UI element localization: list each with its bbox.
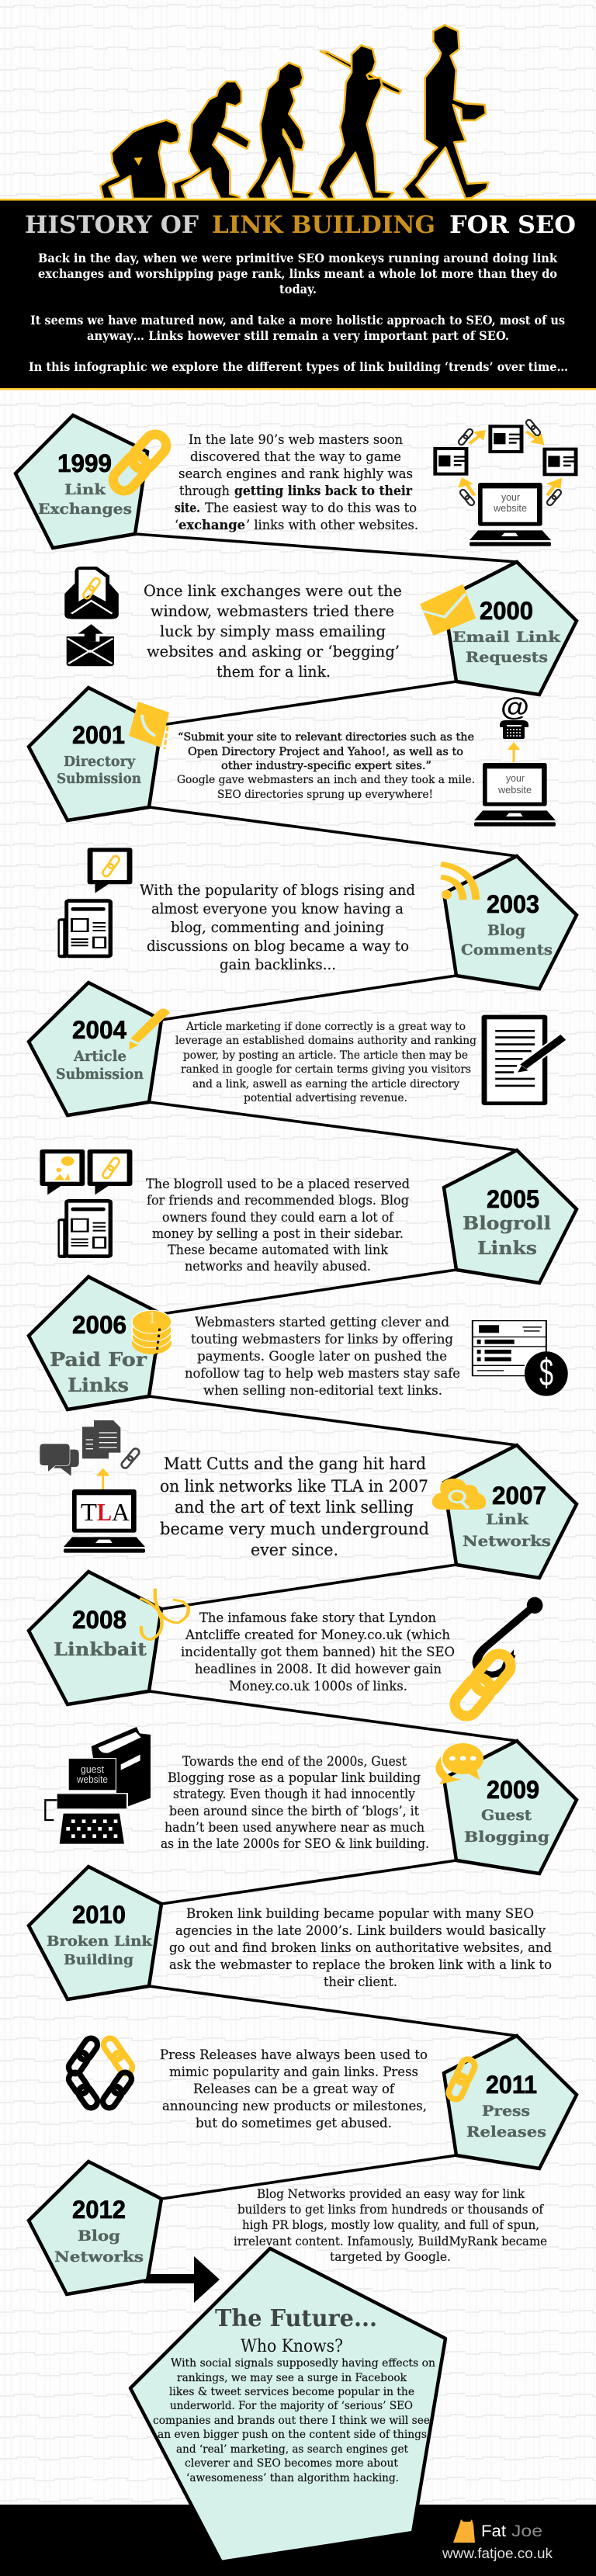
- label: [464, 1807, 549, 1846]
- label: Broken Link: [47, 1934, 153, 1950]
- body text: and ‘real’ marketing, as search engines get: [176, 2443, 408, 2456]
- pentagon 2004: [29, 983, 161, 1115]
- year 2012: 2012: [72, 2196, 126, 2224]
- intro text: [29, 251, 568, 374]
- body text: [160, 1454, 429, 1560]
- body text: through: [179, 484, 230, 499]
- figure: upright hominid: [247, 63, 313, 199]
- body text: payments. Google later on pushed the: [197, 1349, 447, 1364]
- label: Comments: [461, 941, 553, 959]
- icon: black hook with yellow link: [450, 1597, 542, 1721]
- body text: With social signals supposedly having effects on: [171, 2357, 435, 2370]
- body text: site.: [175, 501, 200, 516]
- panel: 2012 blog networks: [29, 2162, 547, 2294]
- year 2011: 2011: [486, 2071, 537, 2099]
- body text: These became automated with link: [168, 1243, 388, 1257]
- pentagon 2010: [29, 1867, 161, 1999]
- label: Guest: [481, 1807, 532, 1824]
- body text: touting webmasters for links by offering: [191, 1332, 453, 1347]
- logo mark: [453, 2519, 475, 2543]
- body text: [169, 1906, 552, 1990]
- body text: [161, 1754, 429, 1851]
- body text: “Submit your site to relevant directories such as the: [178, 731, 474, 744]
- body text: [185, 1315, 460, 1399]
- icon: envelopes: [64, 567, 119, 666]
- panel: 2003 blog comments: [57, 848, 577, 989]
- body text: agencies in the late 2000’s. Link builders would basically: [175, 1923, 546, 1939]
- icon: comment bubble and newspaper: [57, 848, 132, 958]
- header band black fill: [0, 200, 596, 388]
- icon: document and pen: [482, 1015, 567, 1105]
- body text: an even bigger push on the content side of things: [158, 2429, 427, 2441]
- figure: hunter with spear: [319, 45, 393, 199]
- body text: nofollow tag to help web masters stay safe: [185, 1366, 460, 1382]
- label: Requests: [466, 649, 548, 666]
- body text: them for a link.: [217, 662, 331, 681]
- body text: [144, 581, 402, 681]
- label: [463, 1213, 551, 1259]
- year 1999: 1999: [57, 449, 112, 477]
- body text: getting links back to their: [234, 484, 413, 499]
- title: FOR SEO: [449, 211, 576, 239]
- body text: underworld. For the majority of ‘serious’ SEO: [170, 2400, 413, 2412]
- icon: chat, documents and TLA laptop: [40, 1420, 145, 1553]
- body text: ’ links with other websites.: [246, 518, 418, 533]
- year 2010: 2010: [72, 1901, 126, 1929]
- figure: ape: [100, 120, 180, 199]
- body text: With the popularity of blogs rising and: [140, 882, 415, 899]
- icon: at sign, telephone and laptop: [474, 692, 556, 827]
- body text: exchange: [178, 518, 245, 533]
- icon: at sign, telephone and laptop: website: [497, 784, 532, 796]
- pentagon 2001: [29, 688, 161, 820]
- body text: became very much underground: [160, 1520, 429, 1539]
- icon: small yellow link: [446, 2057, 477, 2102]
- body text: other industry-specific expert sites.”: [221, 760, 431, 772]
- body text: go out and find broken links on authoritative websites, and: [169, 1940, 552, 1956]
- intro text: exchanges and worshipping page rank, links meant a whole lot more than they do: [38, 266, 557, 281]
- body text: [146, 1177, 410, 1274]
- footer band: [0, 2505, 596, 2576]
- logo wordmark second part: Joe: [511, 2522, 542, 2540]
- icon: websites exchanging links: website: [493, 502, 527, 514]
- label: [461, 922, 553, 959]
- year 2005: 2005: [487, 1185, 539, 1213]
- label: Link: [486, 1511, 529, 1528]
- panel: 2007 link networks: [40, 1420, 577, 1578]
- body text: gain backlinks...: [220, 957, 336, 973]
- panel: 2001 directory submission: [29, 688, 556, 827]
- label: [50, 1348, 147, 1396]
- title: LINK BUILDING: [212, 211, 435, 239]
- icon: websites exchanging links: your: [501, 491, 521, 503]
- icon: chat, documents and TLA laptop: L: [97, 1498, 112, 1526]
- ape arm gap: [133, 158, 143, 165]
- label: Article: [73, 1048, 126, 1065]
- body text: as in the late 2000s for SEO & link building.: [161, 1836, 429, 1851]
- body text: leverage an established domains authority and ranking: [175, 1035, 476, 1047]
- icon: yellow coin stack: [132, 1310, 172, 1354]
- body text: Towards the end of the 2000s, Guest: [182, 1754, 407, 1769]
- body text: [175, 432, 418, 533]
- logo wordmark: Fat: [481, 2522, 506, 2540]
- pentagon 2012: [29, 2162, 161, 2294]
- panel: 2000 email link requests: [64, 562, 577, 695]
- panel: 1999 link exchanges: [16, 415, 577, 548]
- body text: potential advertising revenue.: [244, 1092, 407, 1104]
- body text: mimic popularity and gain links. Press: [169, 2065, 418, 2080]
- body text: builders to get links from hundreds or thousands of: [237, 2202, 544, 2217]
- body text: high PR blogs, mostly low quality, and full of spun,: [242, 2217, 539, 2232]
- icon: web page and dollar coin: $: [539, 1350, 553, 1394]
- icon: yellow pencil: [130, 1008, 170, 1050]
- label: Linkbait: [54, 1639, 147, 1660]
- label: [466, 2103, 546, 2141]
- intro text: anyway… Links however still remain a very important part of SEO.: [87, 328, 509, 343]
- body text: networks and heavily abused.: [185, 1259, 371, 1274]
- evolution silhouettes: [100, 25, 488, 199]
- title: [25, 211, 576, 239]
- body text: luck by simply mass emailing: [160, 622, 386, 640]
- body text: Open Directory Project and Yahoo!, as well as to: [188, 746, 463, 758]
- body text: Press Releases have always been used to: [160, 2047, 428, 2063]
- body text: [153, 2357, 435, 2484]
- year 2007: 2007: [492, 1482, 546, 1510]
- icon: book and computer: website: [76, 1774, 108, 1785]
- body text: [140, 882, 415, 973]
- icon: book and computer: guest: [81, 1764, 105, 1775]
- panel: 2009 guest blogging: [45, 1727, 577, 1874]
- figure: early hominid: [173, 81, 250, 199]
- label: Blogroll: [463, 1213, 551, 1234]
- pentagon 2011: [444, 2036, 577, 2169]
- body text: [234, 2186, 547, 2264]
- body text: cleverer and SEO becomes more about: [185, 2457, 398, 2470]
- icon: websites exchanging links: [433, 418, 577, 546]
- body text: for friends and recommended blogs. Blog: [147, 1193, 409, 1208]
- body text: but do sometimes get abused.: [196, 2116, 392, 2131]
- label: Networks: [54, 2248, 144, 2266]
- body text: rankings, we may see a surge in Facebook: [177, 2372, 407, 2384]
- pentagon 2003: [444, 856, 577, 989]
- panel: 2010 broken link building: [29, 1867, 552, 1999]
- body text: discovered that the way to game: [190, 449, 401, 465]
- icon: chat, documents and TLA laptop: A: [112, 1498, 130, 1526]
- website url: www.fatjoe.co.uk: [442, 2546, 553, 2561]
- body text: and the art of text link selling: [175, 1498, 414, 1517]
- body text: ‘awesomeness’ than algorithm hacking.: [186, 2472, 399, 2484]
- icon: yellow search cloud: [432, 1479, 486, 1510]
- icon: book and computer: [45, 1727, 151, 1844]
- body text: [177, 731, 475, 801]
- label: Releases: [466, 2124, 546, 2141]
- year 2006: 2006: [72, 1311, 126, 1339]
- pentagon 2005: [444, 1150, 577, 1283]
- body text: ask the webmaster to replace the broken link with a link to: [169, 1957, 552, 1973]
- body text: announcing new products or milestones,: [162, 2099, 427, 2114]
- pentagon 2009: [444, 1741, 577, 1874]
- coin numeral: 1: [147, 1309, 158, 1327]
- label: Links: [477, 1238, 537, 1259]
- body text: strategy. Even though it had innocently: [173, 1787, 416, 1801]
- body text: money by selling a post in their sidebar.: [152, 1226, 404, 1241]
- body text: window, webmasters tried there: [151, 602, 394, 620]
- body text: Blogging rose as a popular link building: [168, 1770, 421, 1785]
- body text: websites and asking or ‘begging’: [147, 642, 400, 660]
- label: Submission: [56, 1066, 144, 1083]
- year 2009: 2009: [487, 1776, 539, 1804]
- body text: owners found they could earn a lot of: [162, 1210, 394, 1225]
- label: [54, 2228, 144, 2266]
- pentagon 2007: [444, 1445, 577, 1578]
- body text: been around since the birth of ‘blogs’, it: [169, 1804, 419, 1818]
- icon: yellow chain link: [109, 430, 171, 495]
- body text: and a link, aswell as earning the article directory: [192, 1078, 459, 1090]
- label: Email Link: [452, 629, 561, 646]
- year 2004: 2004: [72, 1016, 126, 1044]
- icon: at sign, telephone and laptop: @: [501, 692, 529, 721]
- body text: ranked in google for certain terms giving you visitors: [181, 1063, 471, 1076]
- label: [38, 481, 132, 518]
- body text: ‘: [175, 518, 178, 533]
- body text: Webmasters started getting clever and: [195, 1315, 449, 1330]
- body text: In the late 90’s web masters soon: [189, 432, 403, 448]
- year 2003: 2003: [487, 890, 539, 918]
- body text: The blogroll used to be a placed reserved: [146, 1177, 410, 1191]
- body text: power, by posting an article. The article then may be: [183, 1049, 468, 1062]
- body text: on link networks like TLA in 2007: [160, 1477, 428, 1496]
- body text: ever since.: [251, 1541, 338, 1560]
- panel: 2011 press releases: [66, 2036, 577, 2169]
- icon: chat, documents and TLA laptop: T: [81, 1498, 97, 1526]
- body text: likes & tweet services become popular in the: [169, 2386, 414, 2398]
- label: [47, 1934, 153, 1968]
- pentagon 1999: [16, 415, 147, 548]
- label: [56, 1048, 144, 1083]
- body text: The easiest way to do this was to: [205, 501, 417, 516]
- figure: modern human with helmet: [404, 25, 488, 199]
- body text: Broken link building became popular with many SEO: [186, 1906, 534, 1922]
- icon: web page and dollar coin: [473, 1321, 568, 1396]
- body text: Money.co.uk 1000s of links.: [229, 1679, 407, 1694]
- subheading: who knows: Who Knows?: [241, 2337, 343, 2356]
- body text: when selling non-editorial text links.: [203, 1383, 442, 1399]
- pentagon 2000: [444, 562, 577, 695]
- body text: companies and brands out there I think we will see: [153, 2415, 430, 2427]
- label: [57, 754, 141, 787]
- label: Blog: [487, 922, 525, 939]
- body text: [175, 1021, 476, 1104]
- label: Directory: [64, 754, 136, 770]
- label: Building: [64, 1953, 133, 1968]
- body text: almost everyone you know having a: [151, 901, 404, 917]
- icon: at sign, telephone and laptop: your: [506, 772, 525, 784]
- body text: Article marketing if done correctly is a great way to: [185, 1021, 466, 1033]
- panel: 2006 paid for links: [29, 1277, 568, 1409]
- panel: 2008 linkbait: [29, 1572, 542, 1721]
- icon: yellow directory book: [129, 702, 169, 749]
- body text: Releases can be a great way of: [193, 2082, 396, 2097]
- body text: targeted by Google.: [330, 2249, 451, 2264]
- body text: Once link exchanges were out the: [144, 581, 402, 600]
- body text: Matt Cutts and the gang hit hard: [164, 1454, 426, 1474]
- icon: thin yellow fish hooks: [140, 1589, 189, 1640]
- panel: 2005 blogroll links: [40, 1149, 577, 1283]
- label: [463, 1511, 551, 1550]
- body text: irrelevant content. Infamously, BuildMyRank became: [234, 2234, 547, 2248]
- body text: incidentally got them banned) hit the SEO: [181, 1645, 455, 1660]
- intro text: today.: [279, 282, 317, 296]
- logo: fat joe: [442, 2519, 553, 2561]
- header band: [0, 199, 596, 390]
- icon: yellow chat bubbles: [435, 1743, 483, 1784]
- heading: the future: The Future...: [215, 2305, 377, 2332]
- year 2000: 2000: [480, 597, 533, 625]
- intro text: Back in the day, when we were primitive SEO monkeys running around doing link: [38, 251, 558, 265]
- arrow to the future: [144, 2256, 220, 2303]
- year 2008: 2008: [72, 1606, 126, 1634]
- label: [452, 629, 561, 666]
- panel: 2004 article submission: [29, 983, 567, 1115]
- body text: Blog Networks provided an easy way for link: [257, 2186, 525, 2201]
- body text: [181, 1610, 455, 1694]
- body text: The infamous fake story that Lyndon: [199, 1610, 436, 1626]
- pentagon 2008: [29, 1572, 161, 1704]
- icon: yellow RSS: [441, 864, 476, 900]
- label: Paid For: [50, 1348, 147, 1371]
- label: Blogging: [464, 1829, 549, 1846]
- label: Blog: [78, 2228, 120, 2245]
- body text: Antcliffe created for Money.co.uk (which: [185, 1628, 450, 1643]
- label: Submission: [57, 771, 141, 787]
- icon: ring of chain links: [66, 2036, 135, 2110]
- figure: spear: [321, 51, 401, 94]
- body text: Google gave webmasters an inch and they took a mile.: [177, 774, 475, 786]
- pentagon 2006: [29, 1277, 161, 1409]
- panel: the future: [130, 2248, 445, 2562]
- title: HISTORY OF: [25, 211, 199, 239]
- label: Links: [68, 1374, 129, 1396]
- label: Exchanges: [38, 501, 132, 518]
- pentagon future: [130, 2248, 445, 2562]
- icon: comment bubbles and newspaper: [40, 1149, 132, 1258]
- body text: discussions on blog became a way to: [147, 938, 409, 955]
- body text: SEO directories sprung up everywhere!: [217, 789, 433, 801]
- body text: headlines in 2008. It did however gain: [195, 1662, 442, 1677]
- label: Press: [482, 2103, 530, 2120]
- icon: yellow envelope: [420, 584, 476, 636]
- timeline connector lines: [135, 534, 517, 2199]
- body text: [160, 2047, 428, 2131]
- label: Networks: [463, 1533, 551, 1550]
- year 2001: 2001: [72, 721, 125, 749]
- body text: search engines and rank highly was: [178, 466, 413, 482]
- body text: blog, commenting and joining: [171, 920, 384, 936]
- body text: their client.: [324, 1974, 397, 1990]
- label: Link: [64, 481, 106, 498]
- body text: hadn’t been used anywhere near as much: [165, 1820, 424, 1835]
